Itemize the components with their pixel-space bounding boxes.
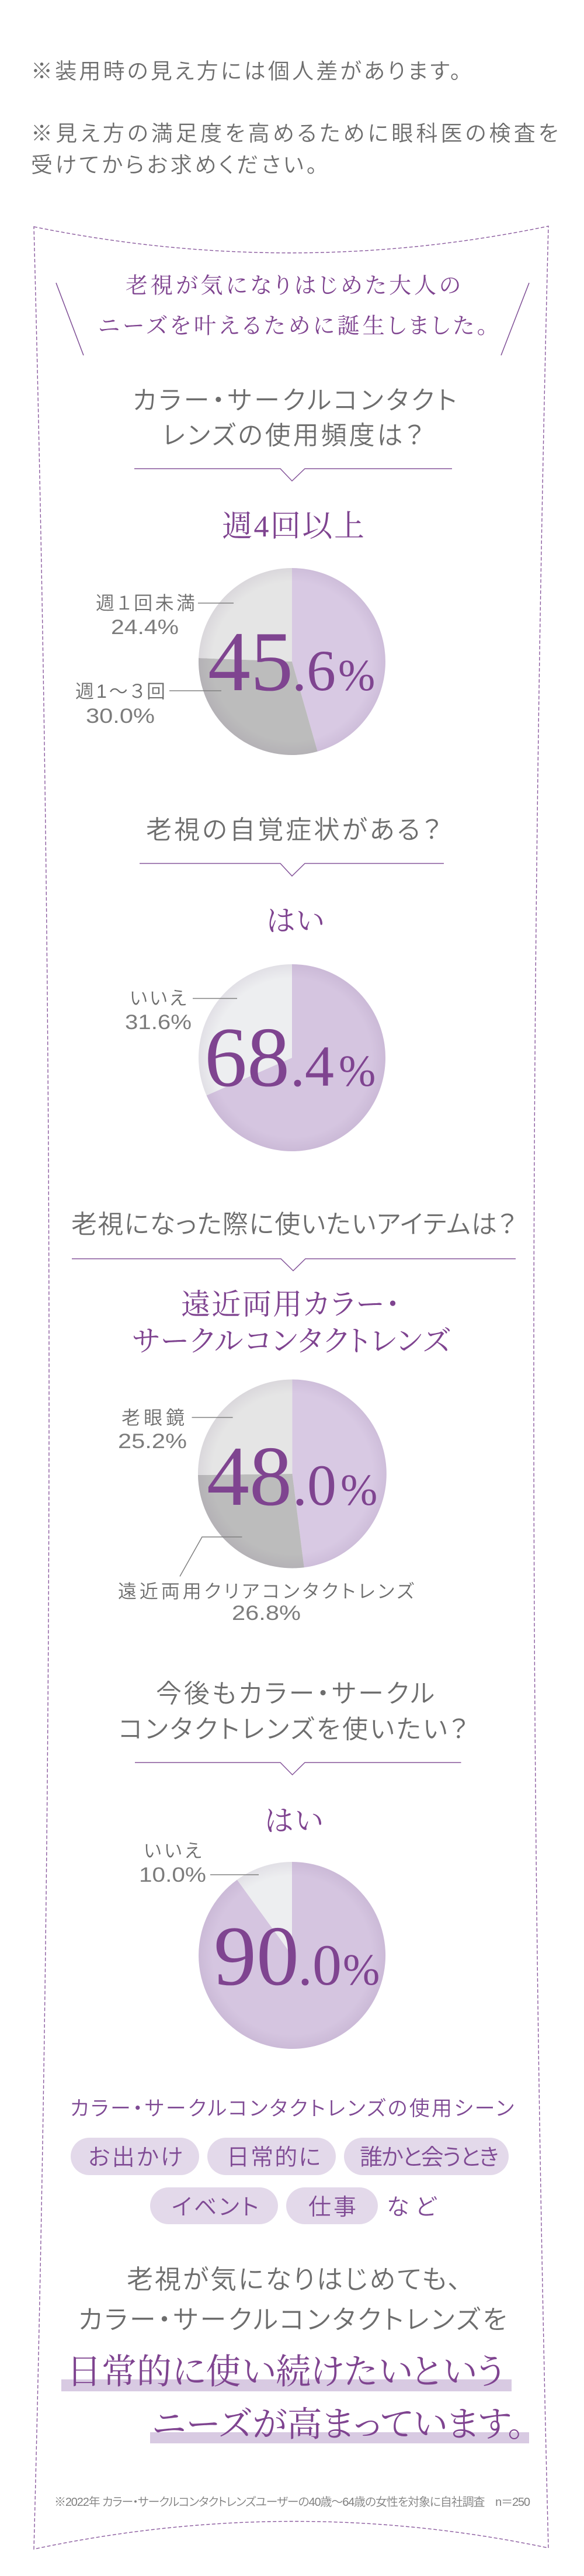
- top notes: ※装用時の見え方には個人差があります。: [31, 60, 461, 83]
- pill: events: イベント: [172, 2195, 259, 2220]
- usage scenes: [70, 2097, 514, 2224]
- question 4: コンタクトレンズを使いたい？: [119, 1715, 468, 1744]
- label: no: 31.6%: [125, 1011, 192, 1034]
- answer 3: [133, 1288, 450, 1358]
- conclusion emphasis: [67, 2353, 526, 2444]
- pill: daily: 日常的に: [227, 2145, 321, 2170]
- pill: meeting someone: [344, 2138, 509, 2175]
- top notes: [31, 60, 558, 177]
- big number 45.6%: 45: [208, 614, 293, 709]
- conclusion: [61, 2265, 529, 2444]
- intro heading with slashes: ニーズを叶えるために誕生しました。: [98, 314, 488, 339]
- scenes heading: カラー・サークルコンタクトレンズの使用シーン: [70, 2097, 514, 2120]
- highlight band 2: [150, 2432, 529, 2443]
- label: 1 to 3 times a week: 週1～３回: [75, 681, 165, 702]
- label: under once a week: 週１回未満: [96, 593, 195, 614]
- conclusion emphasis: ニーズが高まっています。: [152, 2405, 526, 2444]
- label: no: [125, 988, 237, 1034]
- label: no: いいえ: [144, 1840, 201, 1861]
- dashed curved frame: [34, 226, 548, 2549]
- big number 48.0%: .0: [293, 1453, 336, 1518]
- conclusion lead-in: [78, 2265, 507, 2335]
- big number 90.0%: %: [343, 1945, 380, 1995]
- answer 2: はい: [266, 905, 324, 937]
- right slash: [501, 283, 529, 355]
- big number 45.6%: [208, 614, 375, 709]
- pie chart 3: [198, 1379, 387, 1569]
- pill: meeting someone: 誰かと会うとき: [360, 2145, 499, 2170]
- answer 1: 週4回以上: [222, 510, 364, 543]
- intro text: 老視が気になりはじめた大人の: [126, 273, 461, 298]
- label: reading glasses: 老眼鏡: [121, 1407, 185, 1428]
- pie chart 2: [199, 964, 385, 1151]
- label: bifocal clear contact lenses: 遠近両用クリアコンタクトレンズ: [118, 1581, 414, 1602]
- section 4: continued use: [119, 1680, 468, 2049]
- label: no: 10.0%: [139, 1864, 206, 1886]
- left slash: [56, 283, 84, 355]
- pill: outing: お出かけ: [88, 2145, 183, 2170]
- divider arrow: [140, 864, 444, 876]
- big number 68.4%: [204, 1010, 376, 1105]
- big number 48.0%: %: [340, 1466, 377, 1515]
- conclusion lead-in: 老視が気になりはじめても、: [127, 2265, 461, 2294]
- answer 4: はい: [264, 1805, 323, 1837]
- text: etc: など: [387, 2195, 437, 2220]
- answer 3: 遠近両用カラー・: [181, 1288, 400, 1321]
- big number 48.0%: 48: [207, 1429, 292, 1524]
- label: under once a week: 24.4%: [111, 616, 179, 639]
- divider arrow: [134, 469, 452, 481]
- label: reading glasses: [118, 1407, 233, 1453]
- pill: work: 仕事: [308, 2195, 356, 2220]
- conclusion lead-in: カラー・サークルコンタクトレンズを: [78, 2305, 507, 2335]
- top notes: 受けてからお求めください。: [31, 153, 317, 177]
- big number 90.0%: 90: [214, 1909, 299, 2003]
- pill: outing: [71, 2138, 199, 2175]
- footnote: ※2022年 カラー・サークルコンタクトレンズユーザーの40歳～64歳の女性を対象に自社調査 n＝250: [54, 2495, 530, 2509]
- conclusion emphasis: 日常的に使い続けたいという: [67, 2353, 503, 2391]
- intro heading with slashes: [56, 273, 529, 355]
- big number 45.6%: %: [338, 651, 375, 700]
- question 1: カラー・サークルコンタクト: [133, 386, 457, 415]
- answer 3: サークルコンタクトレンズ: [133, 1325, 450, 1358]
- label: no: [139, 1840, 259, 1886]
- pie chart 1: [199, 568, 385, 755]
- label: bifocal clear contact lenses: [118, 1537, 414, 1625]
- big number 68.4%: 68: [204, 1010, 290, 1105]
- question 3: 老視になった際に使いたいアイテムは？: [71, 1210, 516, 1239]
- question 4: [119, 1680, 468, 1744]
- top notes: ※見え方の満足度を高めるために眼科医の検査を: [31, 122, 558, 146]
- highlight band 1: [61, 2380, 512, 2391]
- label: 1 to 3 times a week: [75, 681, 221, 728]
- label: reading glasses: 25.2%: [118, 1430, 187, 1453]
- section 3: desired item: [71, 1210, 516, 1625]
- pie chart 4: [199, 1862, 385, 2049]
- question 1: レンズの使用頻度は？: [162, 421, 423, 450]
- label: under once a week: [96, 593, 234, 639]
- question 1: [133, 386, 457, 450]
- big number 68.4%: %: [339, 1047, 376, 1096]
- label: 1 to 3 times a week: 30.0%: [86, 705, 155, 728]
- pill: daily: [207, 2138, 336, 2175]
- divider arrow: [135, 1763, 461, 1775]
- big number 45.6%: .6: [292, 638, 336, 703]
- label: bifocal clear contact lenses: 26.8%: [232, 1602, 301, 1625]
- section 1: usage frequency: [75, 386, 457, 755]
- question 2: 老視の自覚症状がある？: [146, 816, 441, 844]
- big number 90.0%: .0: [298, 1933, 342, 1997]
- label: no: いいえ: [130, 988, 186, 1009]
- section 2: presbyopia symptoms: [125, 816, 444, 1151]
- big number 48.0%: [207, 1429, 377, 1524]
- pill: events: [150, 2187, 278, 2224]
- big number 68.4%: .4: [290, 1034, 334, 1099]
- big number 90.0%: [214, 1909, 380, 2003]
- pill: work: [286, 2187, 378, 2224]
- question 4: 今後もカラー・サークル: [156, 1680, 434, 1708]
- divider arrow: [72, 1259, 516, 1270]
